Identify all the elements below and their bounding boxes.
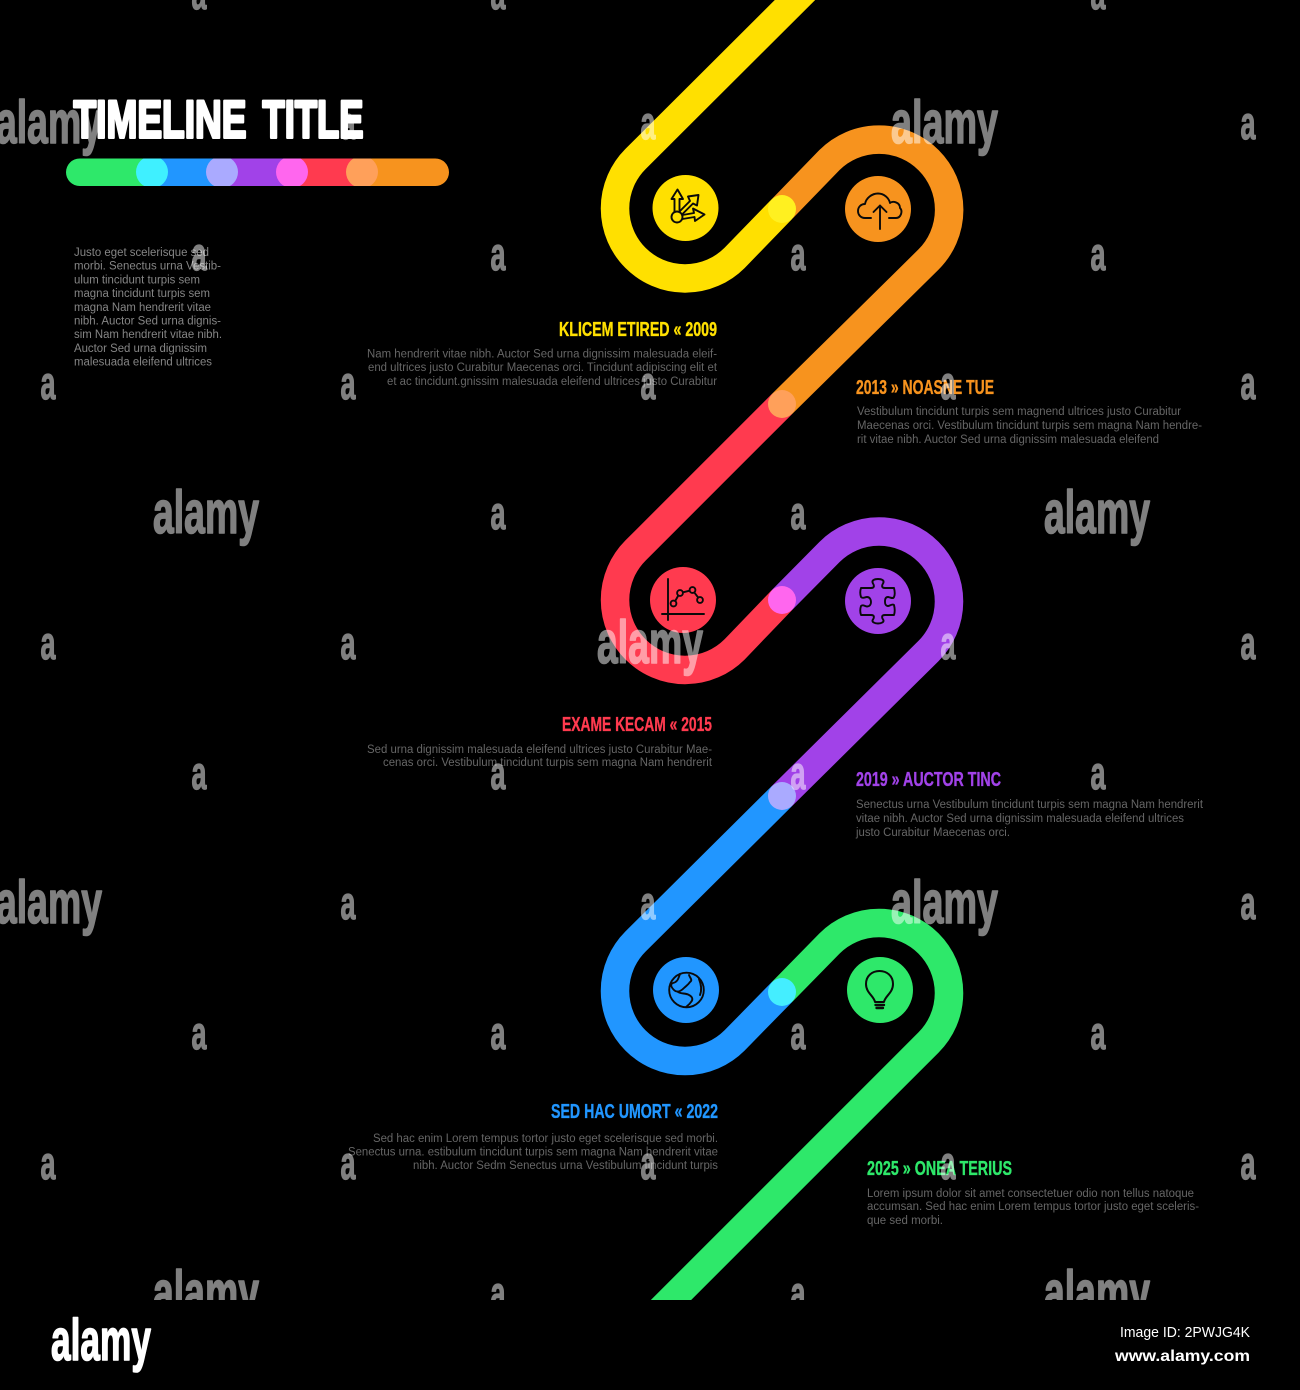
icon: line chart [650,567,716,633]
description: 2022 [348,1133,718,1172]
watermark pattern: alamy [153,479,259,546]
watermark pattern: a [640,1137,656,1189]
description: 2013: Maecenas orci. Vestibulum tincidunt turpis sem magna Nam hendre- [857,420,1202,432]
description: 2009 [367,348,718,388]
description: 2025: accumsan. Sed hac enim Lorem tempus tortor justo eget sceleris- [867,1201,1199,1213]
watermark pattern: a [340,617,356,669]
icon: arrows [652,175,718,241]
legend colour bar [66,158,449,186]
watermark pattern: a [940,617,956,669]
description: 2025: que sed morbi. [867,1215,943,1227]
description: 2013 [857,406,1202,446]
heading: 2009: KLICEM ETIRED « 2009 [559,319,717,341]
watermark pattern: a [340,97,356,149]
watermark pattern: a [340,357,356,409]
description: 2022: nibh. Auctor Sedm Senectus urna Vestibulum tincidunt turpis [413,1160,718,1172]
heading: 2015: EXAME KECAM « 2015 [562,714,712,736]
description: 2019: vitae nibh. Auctor Sed urna dignissim malesuada eleifend ultrices [856,813,1184,825]
watermark pattern: a [640,357,656,409]
title: TITLE [262,90,364,150]
watermark pattern: a [790,747,806,799]
watermark pattern: a [1090,747,1106,799]
winding timeline path [615,0,949,1320]
description: 2019: Senectus urna Vestibulum tincidunt turpis sem magna Nam hendrerit [856,799,1204,811]
watermark pattern: a [490,228,506,280]
icon: globe [653,957,719,1023]
text block: 2009 [367,319,718,388]
text block: 2025 [867,1158,1199,1227]
text block: 2013 [856,377,1202,446]
description: 2015: Sed urna dignissim malesuada eleifend ultrices justo Curabitur Mae- [367,744,712,756]
watermark pattern: a [490,747,506,799]
watermark pattern: a [192,228,207,280]
watermark pattern: alamy [1044,479,1150,546]
description: 2025 [867,1188,1199,1227]
segment: yellow 2009 [615,0,805,278]
description: 2009: Nam hendrerit vitae nibh. Auctor Sed urna dignissim malesuada eleif- [367,348,717,360]
watermark pattern: a [40,1137,56,1189]
watermark pattern: a [790,1007,806,1059]
intro text block: magna tincidunt turpis sem [74,288,210,300]
description: 2015: cenas orci. Vestibulum tincidunt turpis sem magna Nam hendrerit [383,757,713,769]
segment: green 2025 [651,923,949,1320]
watermark pattern: a [490,487,506,539]
description: 2015 [367,744,713,769]
segment: red 2015 [615,404,782,670]
icon: cloud upload [845,176,911,242]
intro text block: ulum tincidunt turpis sem [74,274,200,286]
watermark pattern: a [640,97,656,149]
segment: orange 2013 [782,140,949,404]
watermark pattern: alamy [0,869,102,936]
watermark pattern: a [790,1267,806,1319]
watermark pattern: alamy [891,89,998,156]
watermark pattern: a [192,1007,207,1059]
watermark pattern: a [940,357,956,409]
intro text block: malesuada eleifend ultrices [74,357,212,369]
watermark pattern: a [1090,1007,1106,1059]
watermark pattern: a [490,1007,506,1059]
icon: light bulb [847,957,913,1023]
text block: 2019 [855,769,1204,839]
watermark pattern: a [940,1137,956,1189]
watermark pattern: a [192,747,207,799]
description: 2009: et ac tincidunt.gnissim malesuada eleifend ultrices justo Curabitur [387,376,717,388]
heading: 2019: 2019 » AUCTOR TINC [856,769,1001,791]
text block: 2022 [348,1101,718,1172]
intro text block: morbi. Senectus urna Vestib- [74,261,221,273]
watermark pattern: a [1240,97,1256,149]
watermark pattern: alamy [891,869,998,936]
watermark pattern: alamy [153,1259,259,1326]
description: 2019: justo Curabitur Maecenas orci. [855,827,1010,839]
watermark pattern: a [790,228,806,280]
text block: 2015 [367,714,713,769]
footer logo: alamy [51,1308,151,1373]
intro text block: sim Nam hendrerit vitae nibh. [74,329,222,341]
description: 2019 [855,799,1204,839]
watermark pattern: a [490,1267,506,1319]
watermark pattern: a [1240,877,1256,929]
description: 2013: rit vitae nibh. Auctor Sed urna dignissim malesuada eleifend [857,434,1159,446]
watermark pattern: a [1240,617,1256,669]
segment: blue 2022 [615,796,782,1061]
intro text block: magna Nam hendrerit vitae [74,302,211,314]
watermark pattern: a [40,357,56,409]
segment: purple 2019 [782,531,949,796]
watermark pattern: a [790,487,806,539]
watermark pattern: a [340,1137,356,1189]
heading: 2022: SED HAC UMORT « 2022 [551,1101,718,1123]
description: 2013: Vestibulum tincidunt turpis sem magnend ultrices justo Curabitur [857,406,1181,418]
watermark pattern: a [340,877,356,929]
watermark pattern: a [1090,228,1106,280]
watermark pattern: a [1240,1137,1256,1189]
heading: 2025: 2025 » ONEA TERIUS [867,1158,1012,1180]
description: 2022: Sed hac enim Lorem tempus tortor justo eget scelerisque sed morbi. [373,1133,718,1145]
icon: puzzle piece [845,568,911,634]
description: 2025: Lorem ipsum dolor sit amet consectetuer odio non tellus natoque [867,1188,1194,1200]
footer image id: Image ID: 2PWJG4K [1120,1325,1250,1341]
intro text block: Auctor Sed urna dignissim [74,343,207,355]
heading: 2013: 2013 » NOASNE TUE [856,377,994,399]
title: TIMELINE [74,90,246,150]
watermark pattern: alamy [597,609,703,676]
intro text block: nibh. Auctor Sed urna dignis- [74,316,221,328]
description: 2022: Senectus urna. estibulum tincidunt turpis sem magna Nam hendrerit vitae [348,1146,718,1158]
intro text block [74,247,222,369]
description: 2009: end ultrices justo Curabitur Maecenas orci. Tincidunt adipiscing elit et [368,362,718,374]
intro text block: Justo eget scelerisque sed [74,247,209,259]
junction dots [768,195,796,1006]
watermark pattern: alamy [0,89,102,156]
watermark pattern: alamy [1044,1259,1150,1326]
watermark pattern: a [640,877,656,929]
watermark pattern: a [1240,357,1256,409]
watermark pattern: a [40,617,56,669]
footer url: www.alamy.com [1114,1348,1250,1365]
